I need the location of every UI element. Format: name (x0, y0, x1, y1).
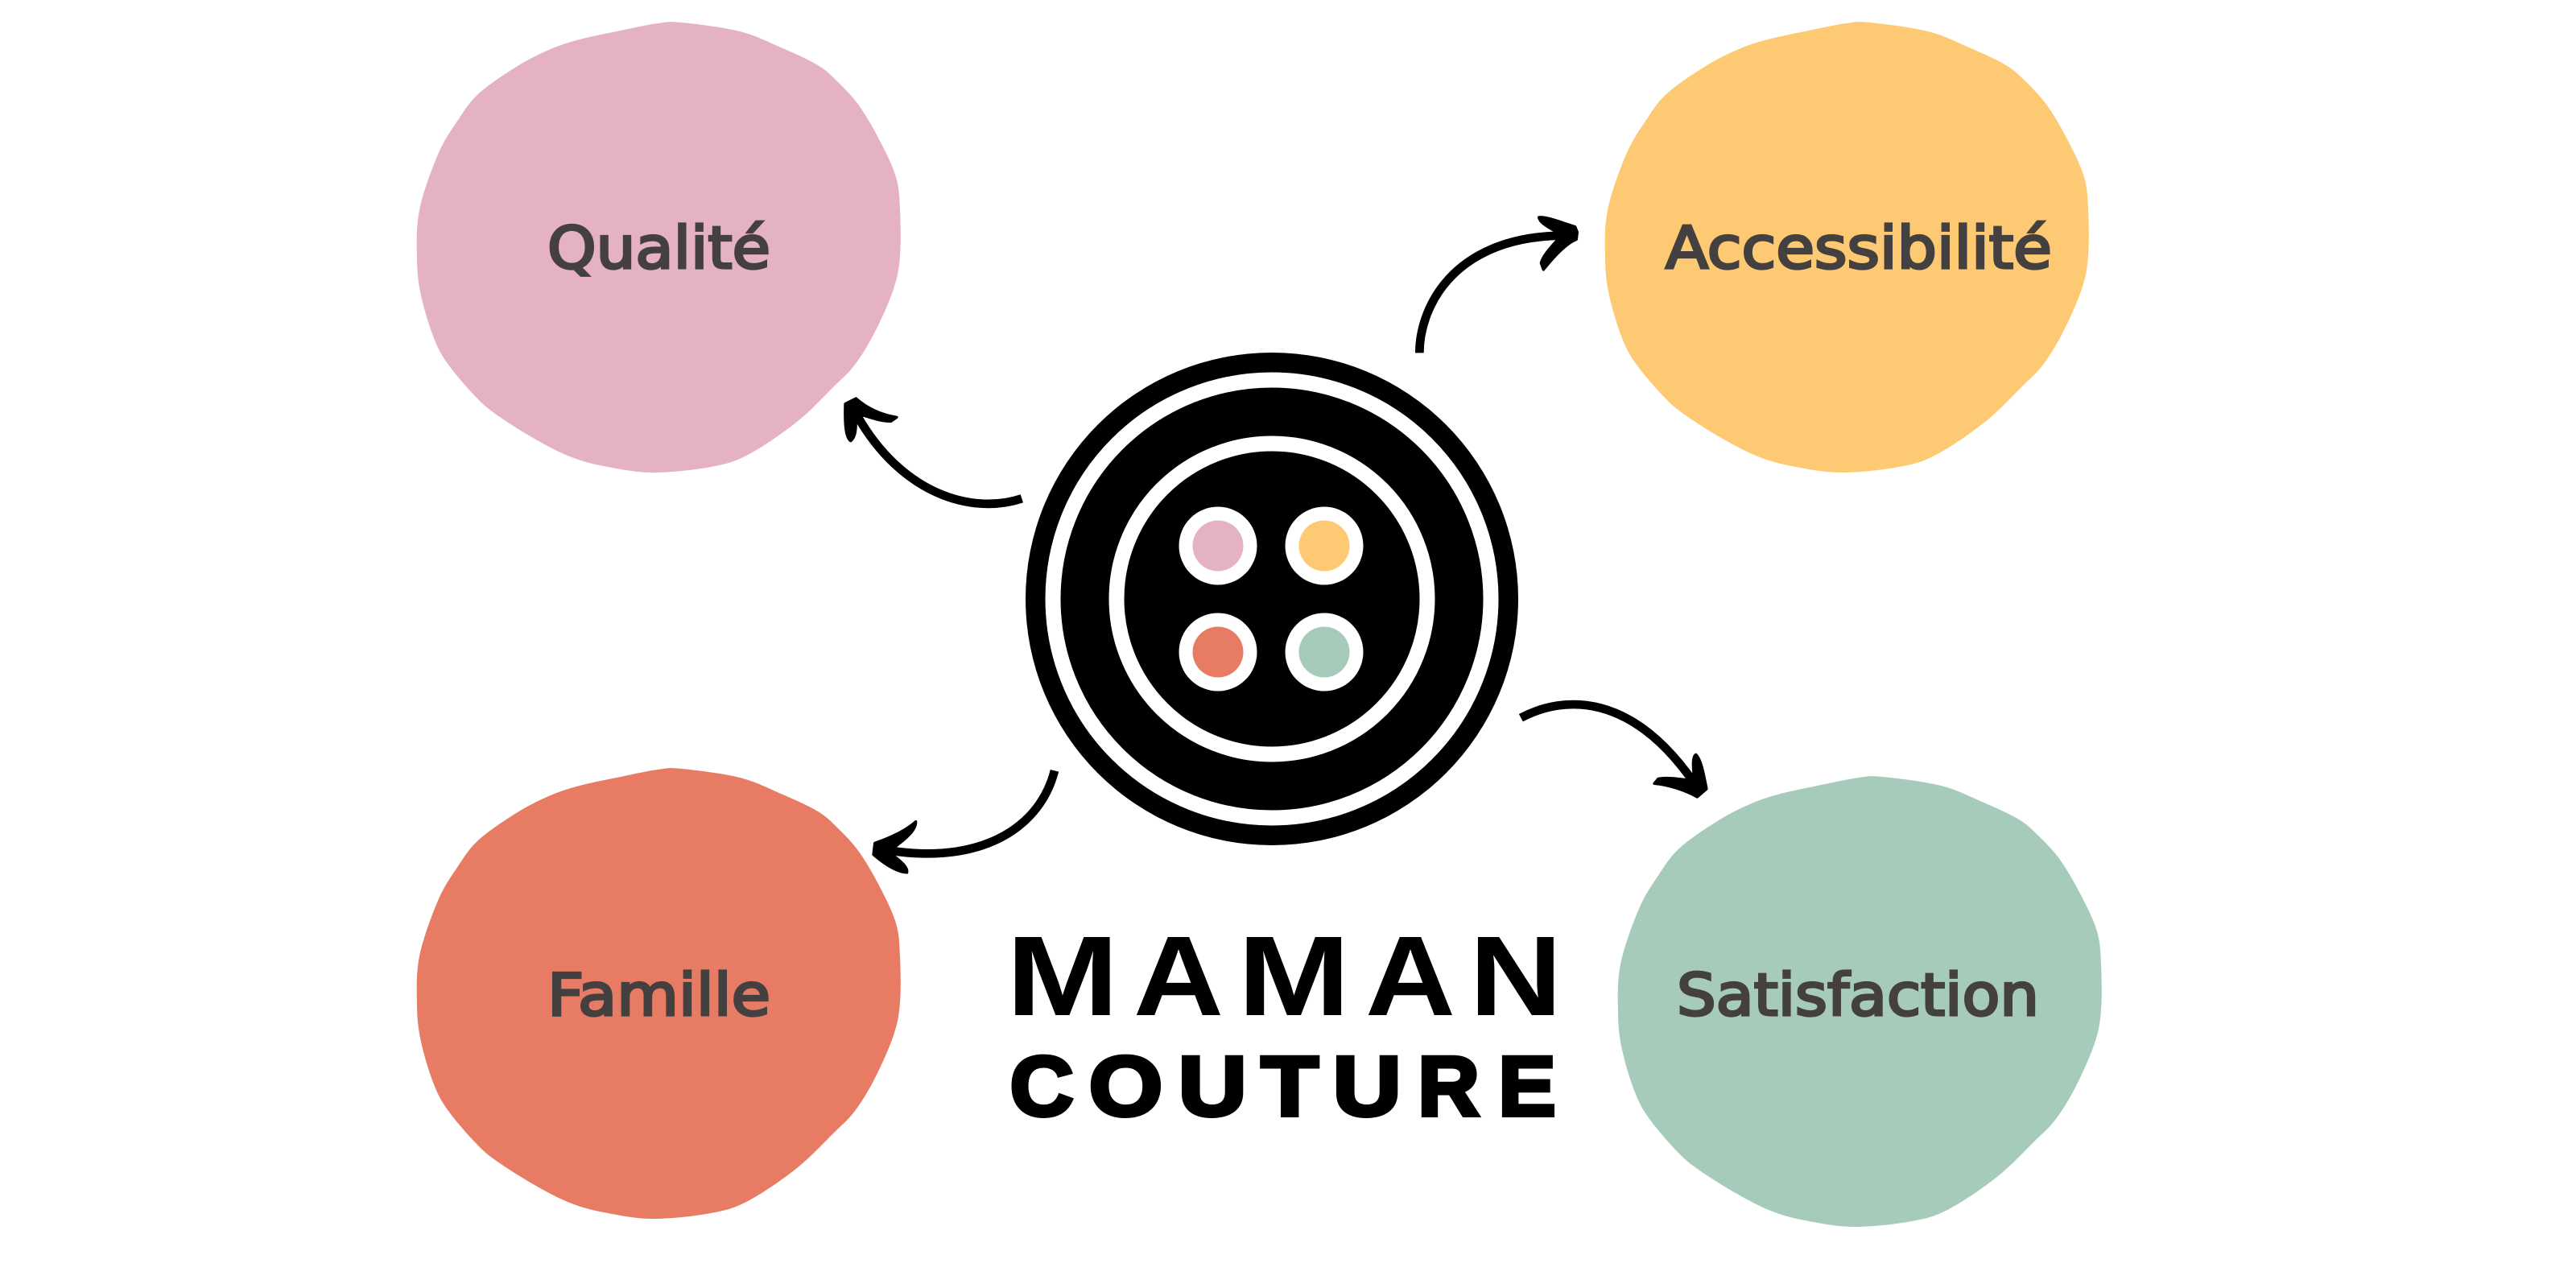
title line: MAMAN: N (1469, 913, 1563, 1039)
title line: COUTURE: U (1179, 1038, 1247, 1133)
title line: MAMAN: A (1365, 913, 1455, 1039)
title line: COUTURE: E (1498, 1039, 1556, 1133)
title line: COUTURE: C (1010, 1038, 1073, 1133)
title line: MAMAN: M (1006, 913, 1119, 1039)
title line: MAMAN: A (1133, 913, 1224, 1039)
title line: COUTURE (1010, 1038, 1556, 1133)
arrow: to Famille (873, 770, 1055, 873)
title line: MAMAN (1006, 913, 1563, 1039)
label: Satisfaction: Satisfaction (1677, 961, 2039, 1029)
title line: COUTURE: R (1418, 1039, 1480, 1133)
title line: MAMAN: M (1238, 913, 1350, 1039)
panel: Famille blob (417, 768, 901, 1219)
label: Famille: Famille (547, 961, 770, 1029)
arrow: to Accessibilité (1419, 217, 1577, 353)
panel: Satisfaction blob (1618, 776, 2102, 1227)
panel: Qualité blob (417, 22, 901, 473)
arrow: to Satisfaction (1521, 704, 1707, 797)
title: MAMAN COUTURE (1006, 913, 1563, 1133)
panel: Accessibilité blob (1605, 22, 2089, 473)
label: Qualité: Qualité (547, 214, 770, 282)
arrow: to Qualité (845, 398, 1022, 504)
title line: COUTURE: O (1089, 1038, 1162, 1133)
title line: COUTURE: T (1261, 1039, 1319, 1133)
label: Accessibilité: Accessibilité (1666, 214, 2052, 282)
icon: central button (1026, 353, 1518, 845)
title line: COUTURE: U (1333, 1038, 1402, 1133)
